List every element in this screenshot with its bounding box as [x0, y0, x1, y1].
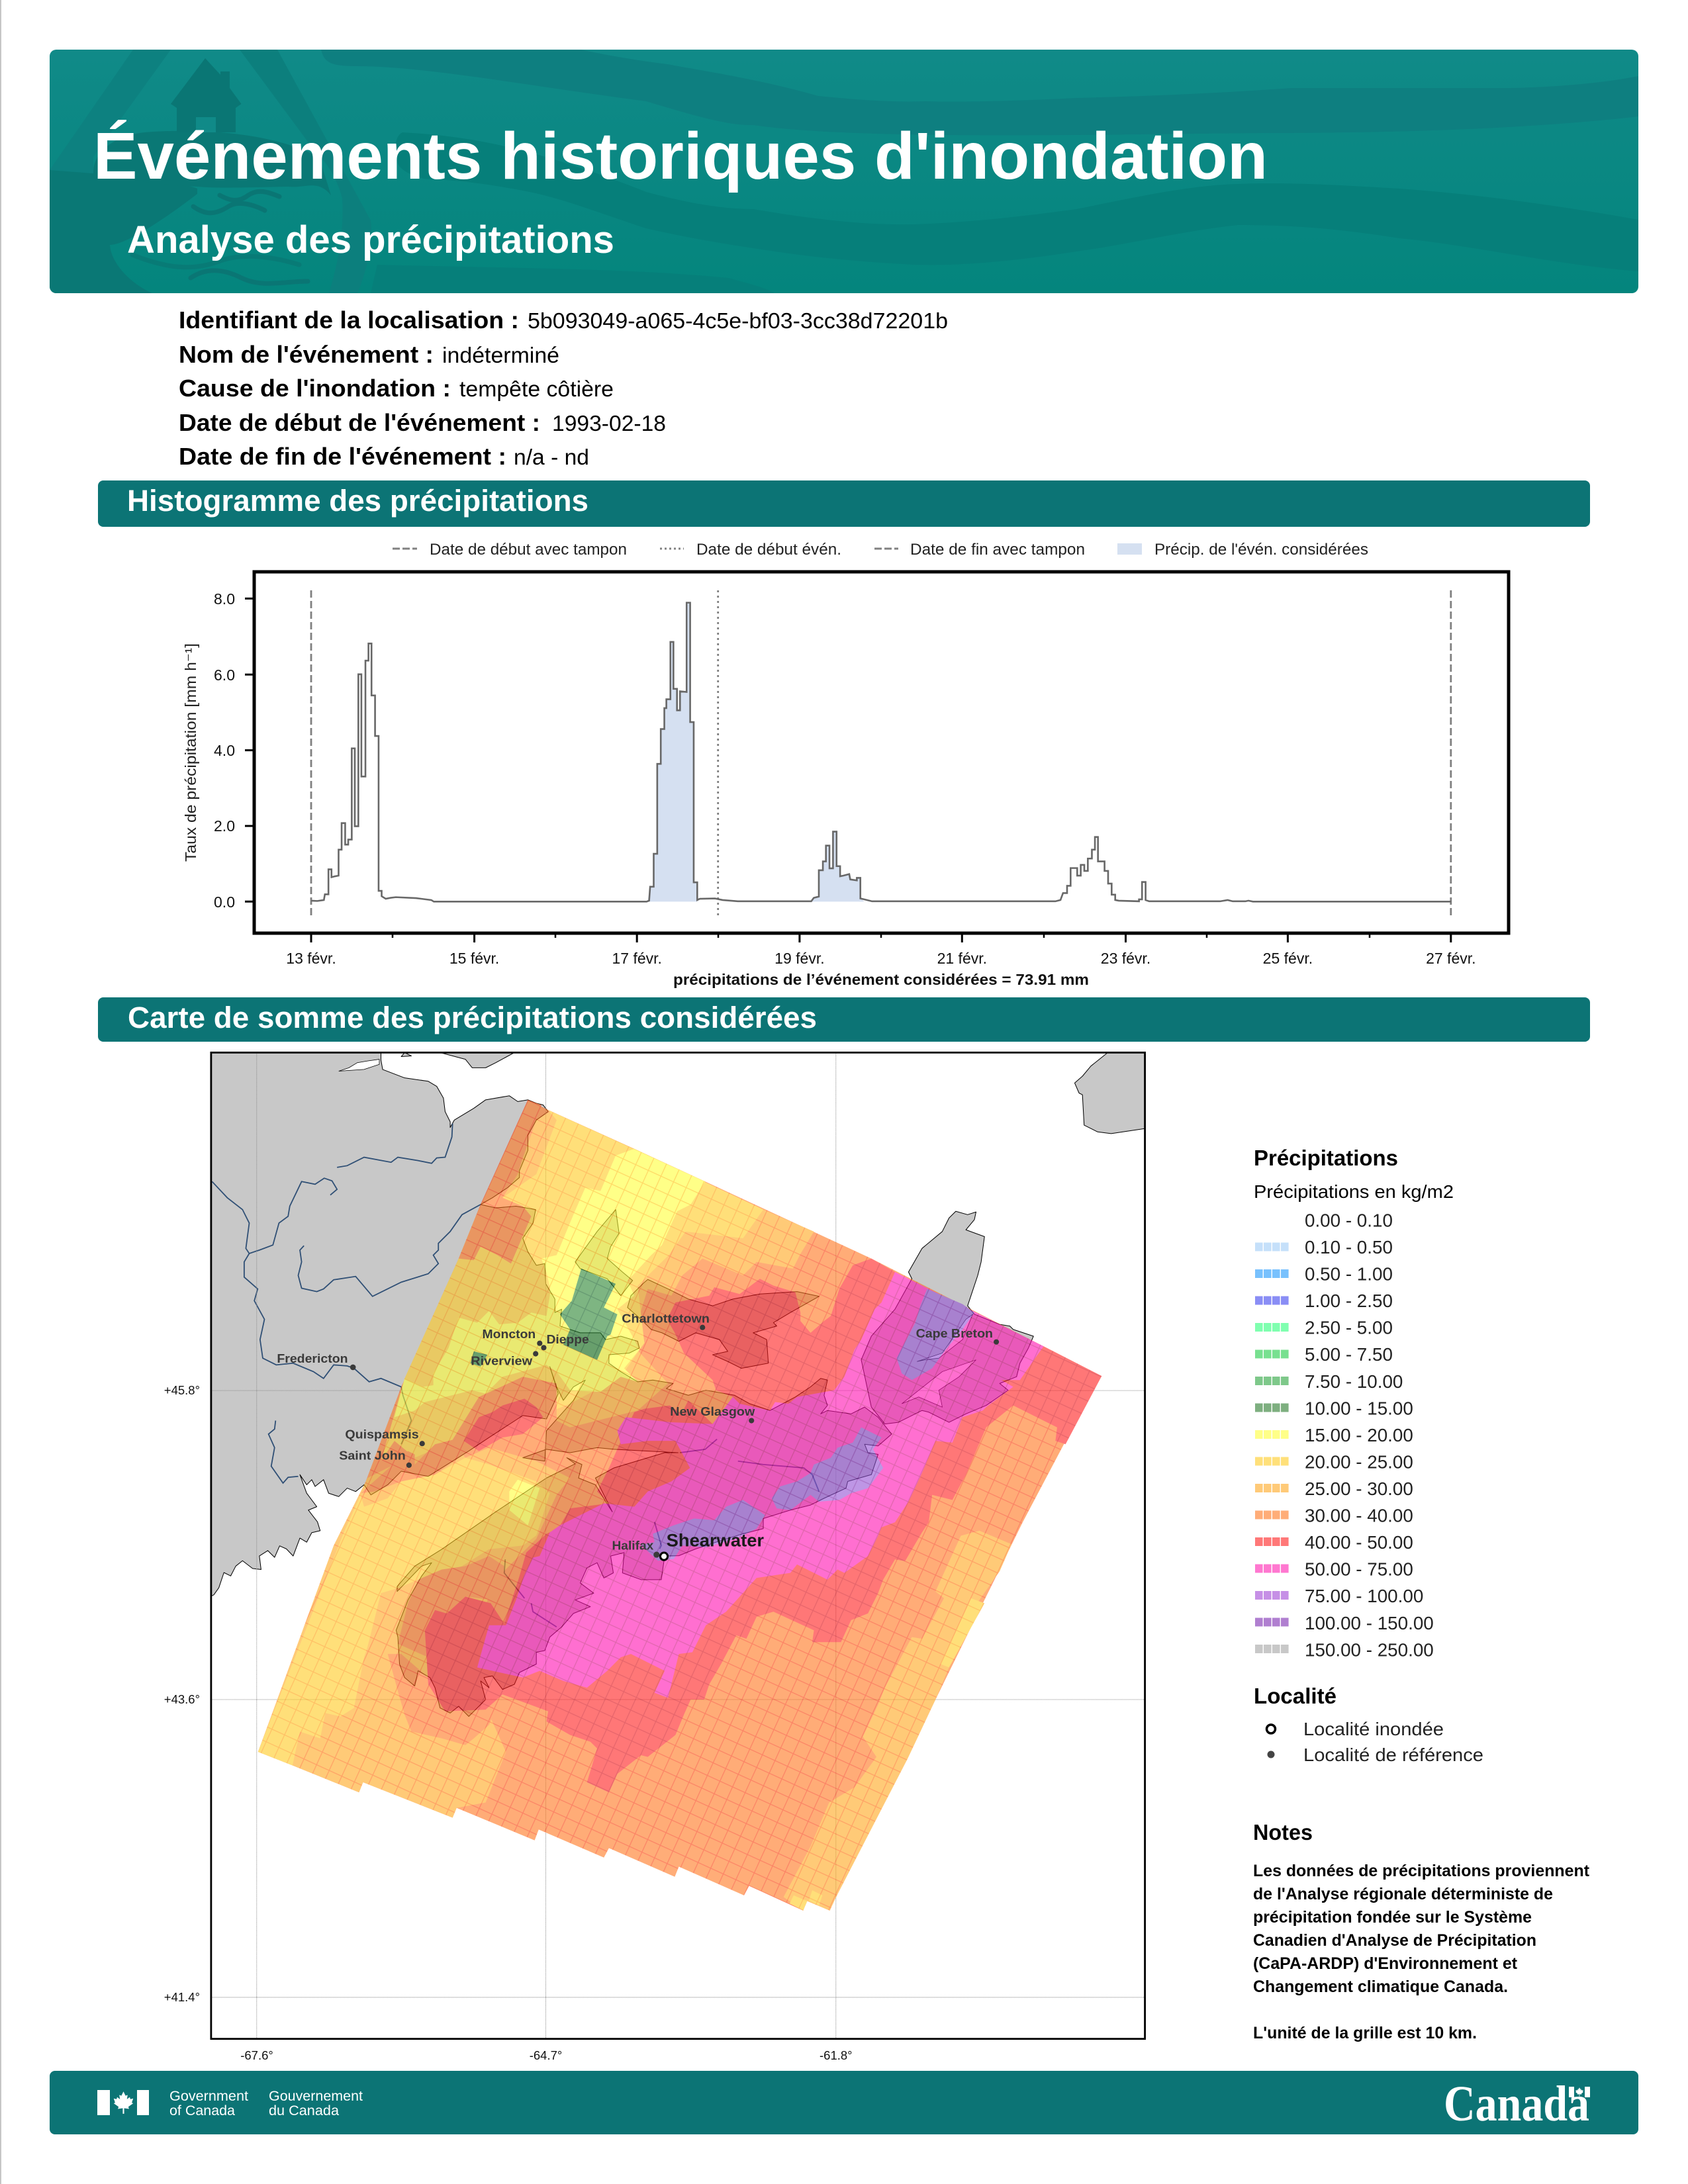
map place labels: Quispamsis [345, 1428, 419, 1441]
section heading: map [98, 997, 1590, 1042]
legend class labels: 1.00 - 2.50 [1305, 1291, 1393, 1311]
event metadata [179, 306, 948, 470]
notes body: de l'Analyse régionale déterministe de [1253, 1885, 1553, 1903]
map place labels: Moncton [483, 1327, 536, 1341]
precipitation grid cells [258, 1100, 1102, 1911]
map locality points [350, 1325, 999, 1558]
cells 75-150 [641, 1289, 974, 1561]
y axis title: Taux de précipitation [mm h⁻¹] [182, 643, 199, 862]
legend title: Précipitations [1254, 1146, 1398, 1170]
cells 25-30 [258, 1112, 1011, 1911]
map place labels: New Glasgow [670, 1404, 755, 1418]
footer band [50, 2071, 1638, 2134]
y axis ticks and labels: 4.0 [214, 742, 235, 759]
cells 40-50 [425, 1259, 1102, 1792]
x axis ticks and labels: 15 févr. [449, 950, 499, 967]
y axis ticks and labels [214, 590, 254, 911]
graticule [211, 1052, 1145, 2039]
x axis ticks and labels: 17 févr. [612, 950, 662, 967]
x axis ticks and labels: 27 févr. [1426, 950, 1476, 967]
header banner [50, 50, 1638, 293]
legend: event start: Date de début évén. [696, 541, 841, 559]
start date: 1993-02-18 [552, 411, 666, 435]
map place labels: Fredericton [277, 1351, 348, 1365]
cells 10-15 [471, 1269, 618, 1367]
y axis ticks and labels: 0.0 [214, 893, 235, 911]
legend class labels: 50.00 - 75.00 [1305, 1559, 1413, 1579]
total precipitation caption: précipitations de l’événement considérées = 73.91 mm [673, 971, 1089, 988]
banner watermark: waves and flood logo [50, 50, 1638, 293]
notes body: précipitation fondée sur le Système [1253, 1908, 1532, 1927]
y axis ticks and labels: 6.0 [214, 666, 235, 684]
legend class labels: 0.10 - 0.50 [1305, 1237, 1393, 1257]
map place labels: Charlottetown [622, 1312, 710, 1326]
legend class labels: 2.50 - 5.00 [1305, 1317, 1393, 1338]
map place labels: Halifax [612, 1538, 654, 1552]
cells 30-40 base footprint [258, 1100, 1102, 1911]
legend: considered precipitation: Précip. de l'évén. considérées [1154, 541, 1368, 559]
event name: indéterminé [442, 343, 559, 367]
precipitation step line [311, 603, 1451, 901]
legend class labels: 20.00 - 25.00 [1305, 1452, 1413, 1472]
legend: locality: Localité [1254, 1684, 1336, 1708]
cells 50-75 [477, 1272, 1044, 1698]
land masses [211, 1052, 1145, 1716]
government signature: du Canada [269, 2103, 339, 2118]
map coordinate labels: -64.7° [530, 2048, 562, 2062]
x axis ticks and labels: 21 févr. [937, 950, 987, 967]
government signature: of Canada [169, 2103, 235, 2118]
notes heading: Notes [1253, 1820, 1313, 1844]
map coordinate labels [164, 1383, 853, 2062]
x axis ticks and labels: 19 févr. [774, 950, 825, 967]
government signature [169, 2089, 363, 2118]
notes body [1253, 1862, 1590, 2042]
notes body: (CaPA-ARDP) d'Environnement et [1253, 1954, 1518, 1973]
location identifier: 5b093049-a065-4c5e-bf03-3cc38d72201b [528, 308, 948, 333]
notes body: Canadien d'Analyse de Précipitation [1253, 1931, 1536, 1950]
end date: Date de fin de l'événement : [179, 443, 506, 470]
map place labels: Dieppe [547, 1332, 589, 1346]
map coordinate labels: +45.8° [164, 1383, 200, 1397]
legend class labels: 0.50 - 1.00 [1305, 1264, 1393, 1284]
flooded locality marker [660, 1553, 668, 1560]
event name: Nom de l'événement : [179, 341, 434, 368]
legend class labels: 40.00 - 50.00 [1305, 1532, 1413, 1553]
cells 20-25 [258, 1110, 984, 1911]
reference locality key: Localité de référence [1303, 1745, 1483, 1765]
section heading: histogram [98, 480, 1590, 527]
event name [179, 341, 559, 368]
notes body: Les données de précipitations proviennent [1253, 1862, 1590, 1880]
legend class labels: 75.00 - 100.00 [1305, 1586, 1423, 1606]
subtitle: Analyse des précipitations [127, 218, 614, 261]
Canada wordmark: Canada [1444, 2076, 1589, 2132]
cells 15-20 [395, 1149, 705, 1525]
precipitation map [211, 1052, 1145, 2039]
map place labels: Saint John [339, 1449, 406, 1463]
x axis ticks and labels [286, 933, 1476, 967]
legend class labels: 15.00 - 20.00 [1305, 1425, 1413, 1445]
title: Événements historiques d'inondation [93, 119, 1268, 193]
map coordinate labels: +41.4° [164, 1990, 200, 2004]
section heading: map: Carte de somme des précipitations considérées [128, 1001, 817, 1034]
map place labels: Riverview [471, 1353, 533, 1367]
map coordinate labels: +43.6° [164, 1692, 200, 1706]
rivers [212, 1124, 819, 1627]
end date: n/a - nd [514, 445, 589, 469]
Newfoundland [1074, 1052, 1145, 1134]
government signature: Gouvernement [269, 2089, 363, 2104]
map place labels [277, 1312, 993, 1552]
x axis ticks and labels: 25 févr. [1263, 950, 1313, 967]
legend: precipitation [1254, 1146, 1454, 1660]
location identifier: Identifiant de la localisation : [179, 306, 519, 334]
map place labels: Cape Breton [916, 1326, 993, 1340]
legend: locality [1254, 1684, 1483, 1765]
legend subtitle: Précipitations en kg/m2 [1254, 1181, 1454, 1202]
precipitation histogram chart [182, 572, 1509, 988]
notes body: Changement climatique Canada. [1253, 1978, 1508, 1996]
government flag symbol [97, 2090, 149, 2115]
map place labels: Shearwater [667, 1530, 764, 1550]
y axis ticks and labels: 2.0 [214, 817, 235, 835]
legend class labels: 25.00 - 30.00 [1305, 1479, 1413, 1499]
notes body: L'unité de la grille est 10 km. [1253, 2024, 1477, 2042]
x axis ticks and labels: 23 févr. [1101, 950, 1150, 967]
considered event fill areas [647, 603, 865, 901]
legend swatches [1255, 1247, 1289, 1649]
legend class labels: 30.00 - 40.00 [1305, 1505, 1413, 1526]
chart legend [393, 541, 1368, 559]
Cape Breton Island [861, 1211, 1033, 1424]
location identifier [179, 306, 948, 334]
legend: start with buffer: Date de début avec tampon [430, 541, 627, 559]
map base [211, 1052, 1145, 2039]
legend: end with buffer: Date de fin avec tampon [910, 541, 1085, 559]
x axis ticks and labels: 13 févr. [286, 950, 336, 967]
water inlets [339, 1060, 976, 1407]
flooded locality key: Localité inondée [1303, 1719, 1444, 1739]
cells 30-40 patches [361, 1100, 557, 1745]
legend class labels: 5.00 - 7.50 [1305, 1344, 1393, 1365]
flood cause: Cause de l'inondation : [179, 375, 451, 402]
legend class labels: 100.00 - 150.00 [1305, 1613, 1434, 1633]
start date: Date de début de l'événement : [179, 409, 540, 436]
map coordinate labels: -67.6° [240, 2048, 273, 2062]
map frame [211, 1052, 1145, 2039]
Prince Edward Island [628, 1279, 819, 1368]
legend class labels: 7.50 - 10.00 [1305, 1371, 1403, 1392]
legend class labels: 0.00 - 0.10 [1305, 1210, 1393, 1231]
section heading: histogram: Histogramme des précipitations [127, 484, 588, 518]
vertical markers [311, 590, 1451, 917]
map coordinate labels: -61.8° [820, 2048, 853, 2062]
legend class labels: 150.00 - 250.00 [1305, 1640, 1434, 1660]
y axis ticks and labels: 8.0 [214, 590, 235, 608]
legend class labels [1305, 1210, 1434, 1660]
flood cause: tempête côtière [459, 377, 614, 401]
flood cause [179, 375, 614, 402]
chart frame [254, 572, 1509, 933]
government signature: Government [169, 2089, 248, 2104]
legend class labels: 10.00 - 15.00 [1305, 1398, 1413, 1419]
